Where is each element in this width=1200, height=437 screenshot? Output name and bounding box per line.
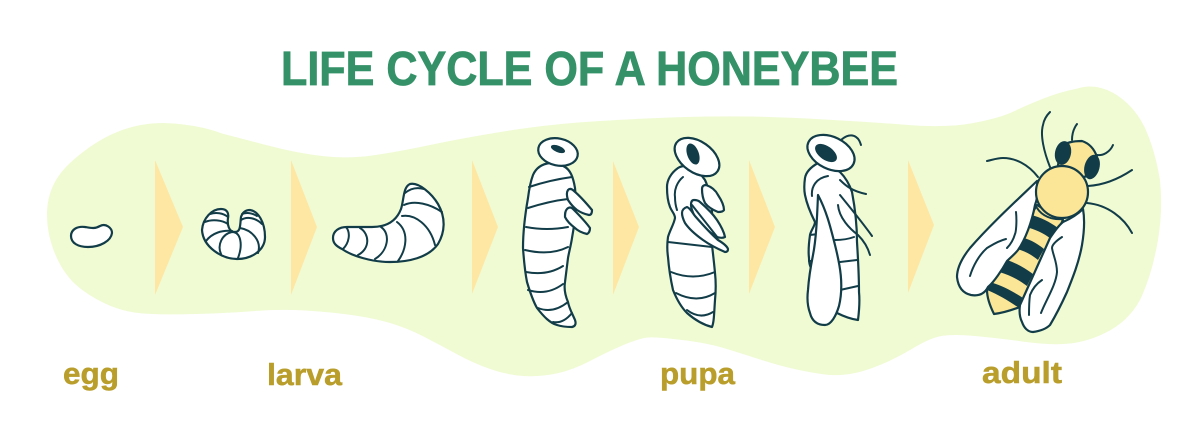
icon: adult bee bbox=[957, 112, 1132, 332]
label: adult: adult bbox=[982, 355, 1062, 390]
label: larva: larva bbox=[267, 357, 343, 392]
background blob bbox=[47, 87, 1161, 376]
arrow 3 bbox=[472, 160, 498, 294]
icon: pupa middle bbox=[667, 130, 728, 327]
arrow 4 bbox=[613, 161, 639, 295]
arrow 6 bbox=[908, 160, 934, 293]
icon: large larva bbox=[333, 184, 444, 262]
arrow 1 bbox=[155, 160, 183, 295]
label: pupa: pupa bbox=[660, 356, 736, 391]
arrow 5 bbox=[749, 160, 775, 294]
arrow 2 bbox=[291, 160, 317, 295]
icon: pupa late bbox=[802, 128, 872, 325]
label: egg: egg bbox=[63, 356, 119, 391]
icon: small larva bbox=[202, 209, 265, 259]
icon: pupa early bbox=[523, 135, 592, 327]
icon: egg bbox=[71, 225, 112, 247]
title: LIFE CYCLE OF A HONEYBEE bbox=[281, 43, 898, 96]
